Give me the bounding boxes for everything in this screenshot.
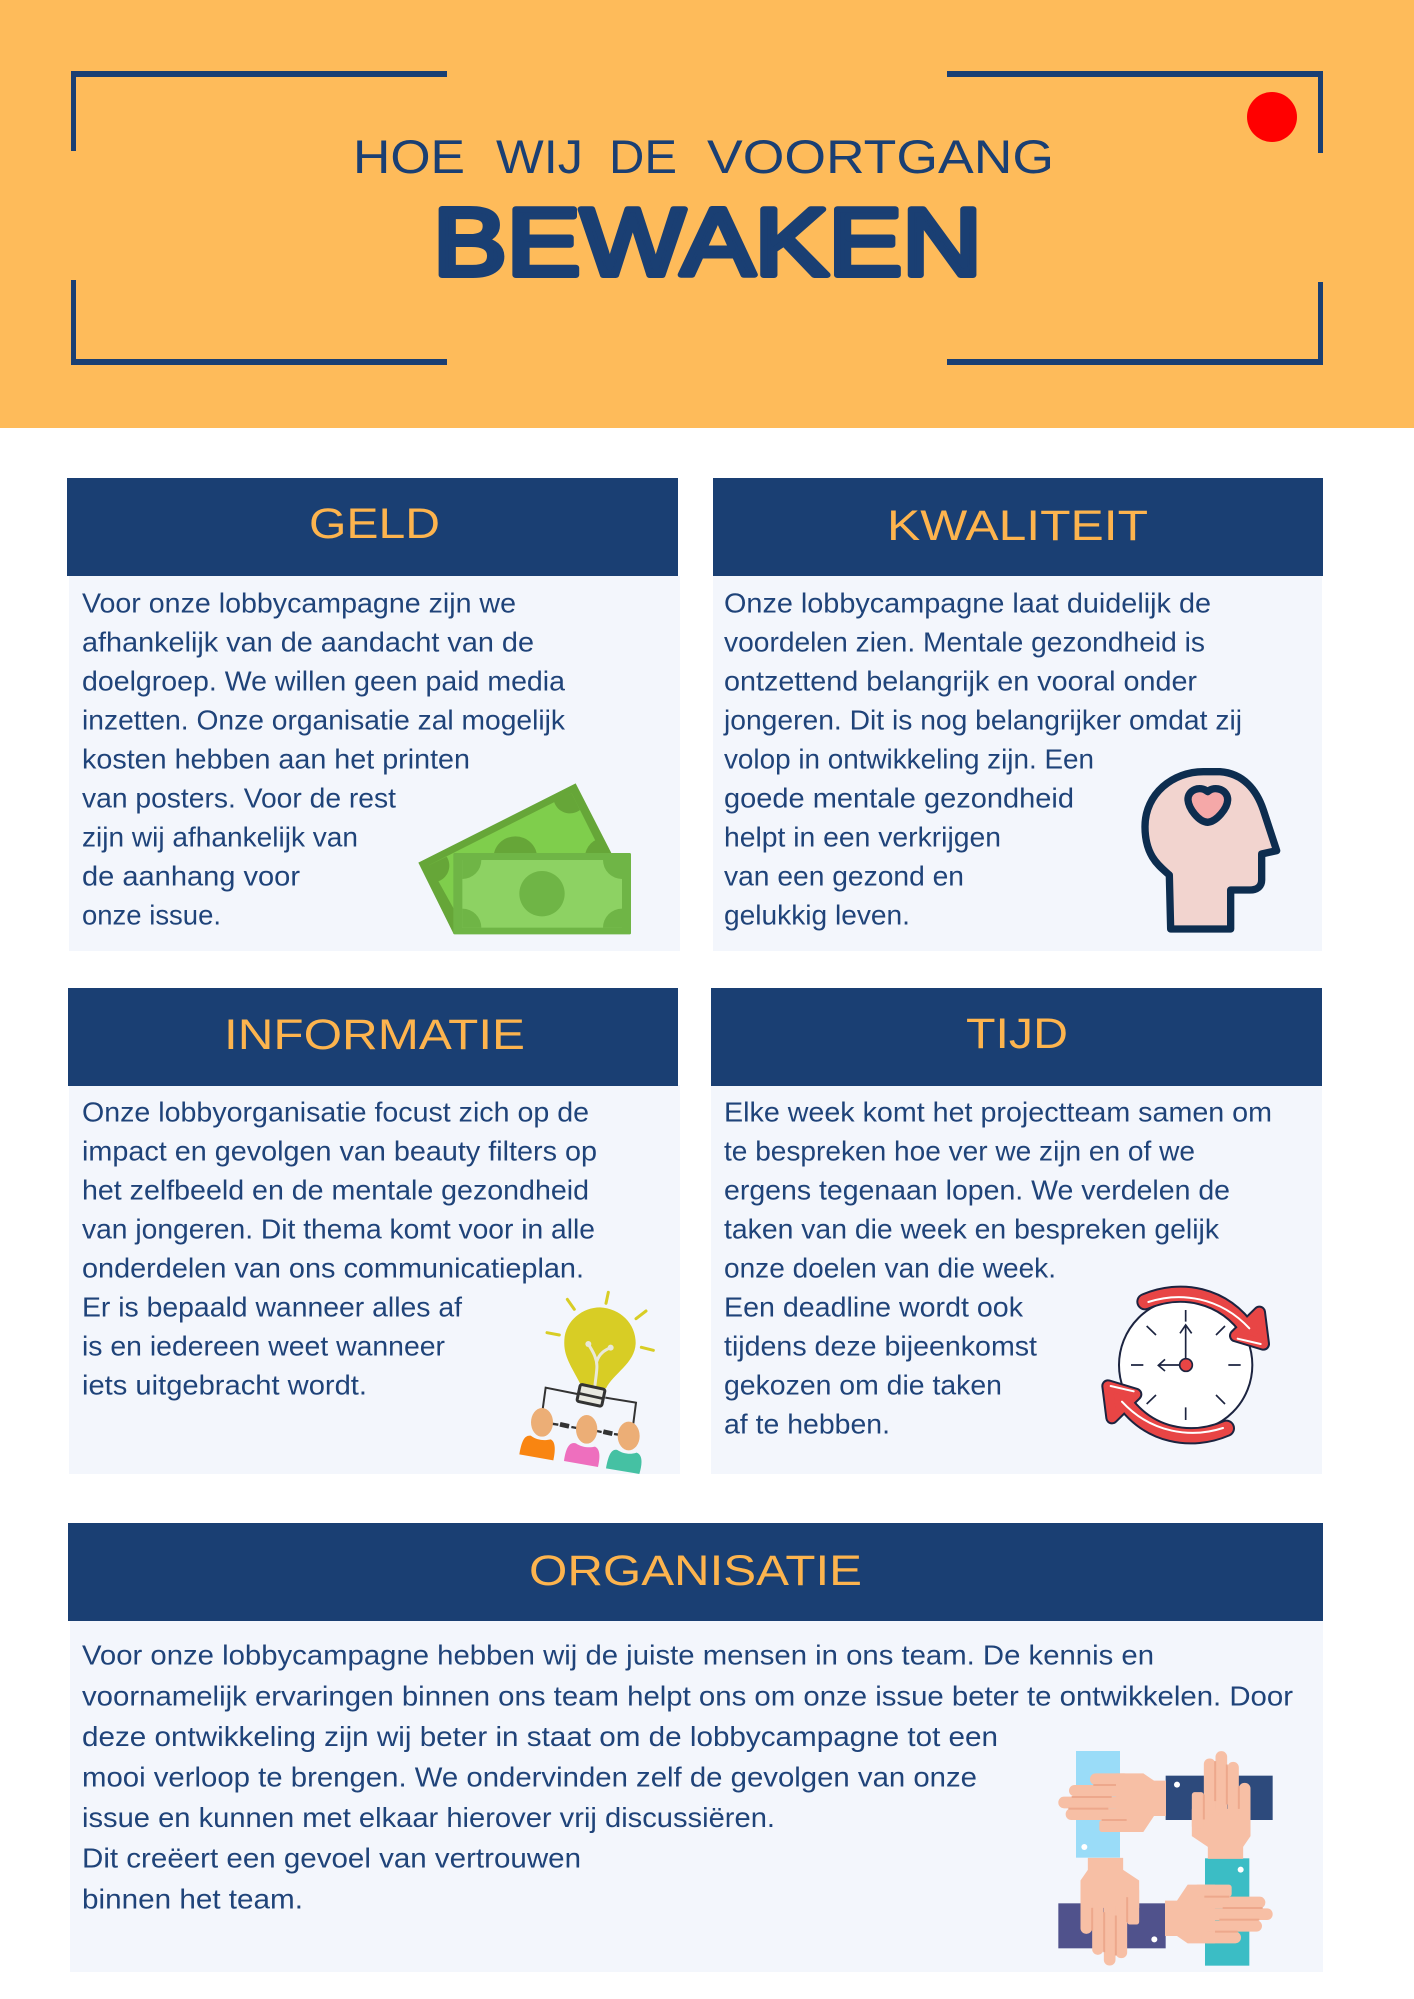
title line 1: DE bbox=[609, 130, 677, 183]
text block: geld: van posters. Voor de rest bbox=[82, 783, 396, 814]
text block: organisatie: deze ontwikkeling zijn wij beter in staat om de lobbycampagne tot een bbox=[82, 1721, 998, 1752]
icon: light bulb with team bbox=[519, 1292, 653, 1474]
text block: informatie: iets uitgebracht wordt. bbox=[82, 1370, 367, 1401]
text block: tijd: Elke week komt het projectteam samen om bbox=[724, 1097, 1272, 1128]
text block: informatie: impact en gevolgen van beauty filters op bbox=[82, 1136, 597, 1167]
title line 1 bbox=[353, 130, 1054, 183]
text block: kwaliteit: voordelen zien. Mentale gezondheid is bbox=[724, 627, 1205, 658]
text block: informatie: Er is bepaald wanneer alles af bbox=[82, 1292, 462, 1323]
text block: geld: onze issue. bbox=[82, 900, 221, 931]
heading: informatie: INFORMATIE bbox=[224, 1011, 525, 1059]
text block: organisatie: Dit creëert een gevoel van vertrouwen bbox=[82, 1843, 581, 1874]
text block: informatie: het zelfbeeld en de mentale gezondheid bbox=[82, 1175, 589, 1206]
text block: geld bbox=[82, 588, 566, 931]
text block: tijd bbox=[724, 1097, 1272, 1440]
icon: clock with arrows bbox=[1108, 1294, 1263, 1436]
panel: kwaliteit bbox=[713, 478, 1323, 951]
text block: geld: doelgroep. We willen geen paid media bbox=[82, 666, 566, 697]
text block: kwaliteit: Onze lobbycampagne laat duidelijk de bbox=[724, 588, 1211, 619]
text block: kwaliteit: helpt in een verkrijgen bbox=[724, 822, 1001, 853]
text block: geld: zijn wij afhankelijk van bbox=[82, 822, 358, 853]
text block: kwaliteit: jongeren. Dit is nog belangrijker omdat zij bbox=[723, 705, 1242, 736]
panel: tijd bbox=[711, 988, 1322, 1474]
heading: kwaliteit: KWALITEIT bbox=[887, 502, 1148, 550]
text block: kwaliteit: volop in ontwikkeling zijn. Een bbox=[724, 744, 1094, 775]
heading: organisatie: ORGANISATIE bbox=[529, 1547, 862, 1595]
text block: organisatie: issue en kunnen met elkaar hierover vrij discussiëren. bbox=[82, 1802, 775, 1833]
text block: informatie: is en iedereen weet wanneer bbox=[82, 1331, 445, 1362]
record dot bbox=[1247, 92, 1297, 142]
text block: informatie: onderdelen van ons communicatieplan. bbox=[82, 1253, 584, 1284]
title line 1: VOORTGANG bbox=[707, 130, 1054, 183]
text block: kwaliteit: gelukkig leven. bbox=[724, 900, 910, 931]
text block: kwaliteit: ontzettend belangrijk en vooral onder bbox=[724, 666, 1197, 697]
title line 2: BEWAKEN bbox=[433, 189, 982, 296]
text block: informatie bbox=[82, 1097, 597, 1401]
text block: tijd: te bespreken hoe ver we zijn en of we bbox=[724, 1136, 1195, 1167]
text block: geld: afhankelijk van de aandacht van de bbox=[82, 627, 534, 658]
text block: organisatie bbox=[82, 1640, 1293, 1914]
heading: geld: GELD bbox=[309, 500, 440, 548]
icon: head with heart bbox=[1145, 772, 1277, 929]
panel: geld bbox=[67, 478, 680, 951]
text block: organisatie: mooi verloop te brengen. We ondervinden zelf de gevolgen van onze bbox=[82, 1762, 977, 1792]
camera frame corners bbox=[71, 71, 1323, 365]
heading: tijd: TIJD bbox=[966, 1010, 1068, 1058]
text block: geld: inzetten. Onze organisatie zal mogelijk bbox=[82, 705, 565, 736]
text block: geld: de aanhang voor bbox=[82, 861, 300, 892]
text block: kwaliteit: goede mentale gezondheid bbox=[724, 783, 1074, 814]
text block: organisatie: voornamelijk ervaringen binnen ons team helpt ons om onze issue beter te ontwikkelen. Door bbox=[82, 1680, 1293, 1711]
text block: tijd: onze doelen van die week. bbox=[724, 1253, 1056, 1284]
text block: kwaliteit: van een gezond en bbox=[724, 861, 964, 892]
text block: tijd: tijdens deze bijeenkomst bbox=[724, 1331, 1037, 1362]
text block: tijd: taken van die week en bespreken gelijk bbox=[724, 1214, 1219, 1245]
text block: tijd: Een deadline wordt ook bbox=[724, 1292, 1023, 1323]
text block: geld: Voor onze lobbycampagne zijn we bbox=[82, 588, 516, 619]
text block: tijd: af te hebben. bbox=[724, 1409, 890, 1440]
panel: informatie bbox=[68, 988, 680, 1474]
text block: informatie: van jongeren. Dit thema komt voor in alle bbox=[82, 1214, 595, 1245]
text block: kwaliteit bbox=[723, 588, 1242, 931]
text block: informatie: Onze lobbyorganisatie focust zich op de bbox=[82, 1097, 589, 1128]
text block: organisatie: Voor onze lobbycampagne hebben wij de juiste mensen in ons team. De kennis en bbox=[82, 1640, 1154, 1671]
title line 1: WIJ bbox=[496, 130, 583, 183]
title line 1: HOE bbox=[353, 130, 465, 183]
text block: geld: kosten hebben aan het printen bbox=[82, 744, 470, 775]
icon: money bbox=[418, 783, 631, 934]
text block: tijd: ergens tegenaan lopen. We verdelen de bbox=[724, 1175, 1230, 1206]
icon: four linked hands bbox=[1058, 1751, 1273, 1966]
text block: tijd: gekozen om die taken bbox=[724, 1370, 1002, 1401]
text block: organisatie: binnen het team. bbox=[82, 1883, 303, 1914]
header banner bbox=[0, 0, 1414, 428]
panel: organisatie bbox=[68, 1523, 1323, 1972]
